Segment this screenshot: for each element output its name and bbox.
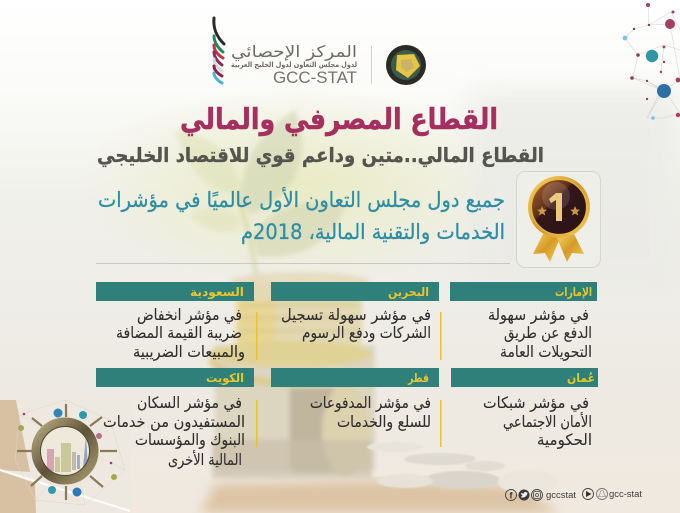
text: Bahrain: في مؤشر سهولة تسجيل [281,306,431,325]
panel: Oman [451,368,598,449]
handle: gcc-stat: gcc-stat [609,489,643,499]
icon: facebook: f [510,490,514,500]
icon: snapchat [596,488,608,500]
panel: UAE [450,282,597,361]
photo: jar of coins [208,272,375,478]
text: Oman: الحكومية [537,431,592,449]
divider [371,46,372,84]
icon: twitter [518,490,530,500]
text: Oman [483,394,592,449]
text: UAE [488,306,592,361]
subtitle: القطاع المالي..متين وداعم قوي للاقتصاد الخليجي [97,143,544,168]
divider line [96,263,510,264]
panel: Kuwait [96,368,258,469]
icon: youtube [582,488,594,500]
text: Kuwait: في مؤشر السكان [137,394,242,413]
text: UAE: في مؤشر سهولة [488,306,589,325]
text: Saudi Arabia: والمبيعات الضريبية [133,343,245,362]
text: Qatar: في مؤشر المدفوعات [310,394,431,413]
statement [98,187,505,244]
social media footer [506,488,643,500]
label: Bahrain: البحرين [388,285,429,299]
text: Saudi Arabia: في مؤشر انخفاض [137,306,242,325]
text: Kuwait: المالية الأخرى [168,450,242,469]
label: Saudi Arabia: السعودية [190,285,244,300]
label: Qatar: قطر [407,371,429,385]
text: Bahrain: الشركات ودفع الرسوم [302,324,431,343]
text: Saudi Arabia: ضريبة القيمة المضافة [116,324,242,342]
text: Kuwait [103,394,245,469]
photo: scattered coins [367,442,558,494]
icon: instagram [532,490,542,500]
panel: Saudi Arabia [96,282,258,362]
text: UAE: التحويلات العامة [500,343,592,361]
panel: Qatar [271,368,442,447]
corner decoration: ship wheel with skyline [0,400,130,513]
panel: Bahrain [271,282,442,360]
logo name: المركز الإحصائي [231,42,357,62]
photo: plant [175,110,345,278]
label: Oman: عُمان [567,371,595,385]
icon: gold medal [516,172,600,268]
text: Oman: الأمان الاجتماعي [503,412,592,432]
title: القطاع المصرفي والمالي [180,102,498,136]
label: UAE: الإمارات [555,285,592,299]
ribbon mark [214,18,224,83]
label: Kuwait: الكويت [206,371,244,386]
text: Qatar: للسلع والخدمات [337,413,431,432]
logo latin: GCC-STAT [273,68,357,87]
emblem [386,45,426,85]
text: Saudi Arabia [116,306,245,362]
corner decoration: network [623,3,680,120]
table surface [200,480,560,513]
handle: gccstat: gccstat [546,490,577,500]
text: Oman: في مؤشر شبكات [483,394,589,413]
statement: الخدمات والتقنية المالية، 2018م [241,220,505,244]
text: Kuwait: المستفيدون من خدمات [103,413,245,432]
text: UAE: الدفع عن طريق [504,324,592,343]
logo tagline: لدول مجلس التعاون لدول الخليج العربية [231,61,357,69]
text: Kuwait: البنوك والمؤسسات [135,431,245,450]
text: Qatar [310,394,431,432]
text: Bahrain [281,306,431,343]
logo [214,18,426,87]
statement: جميع دول مجلس التعاون الأول عالميًا في مؤشرات [98,187,505,212]
